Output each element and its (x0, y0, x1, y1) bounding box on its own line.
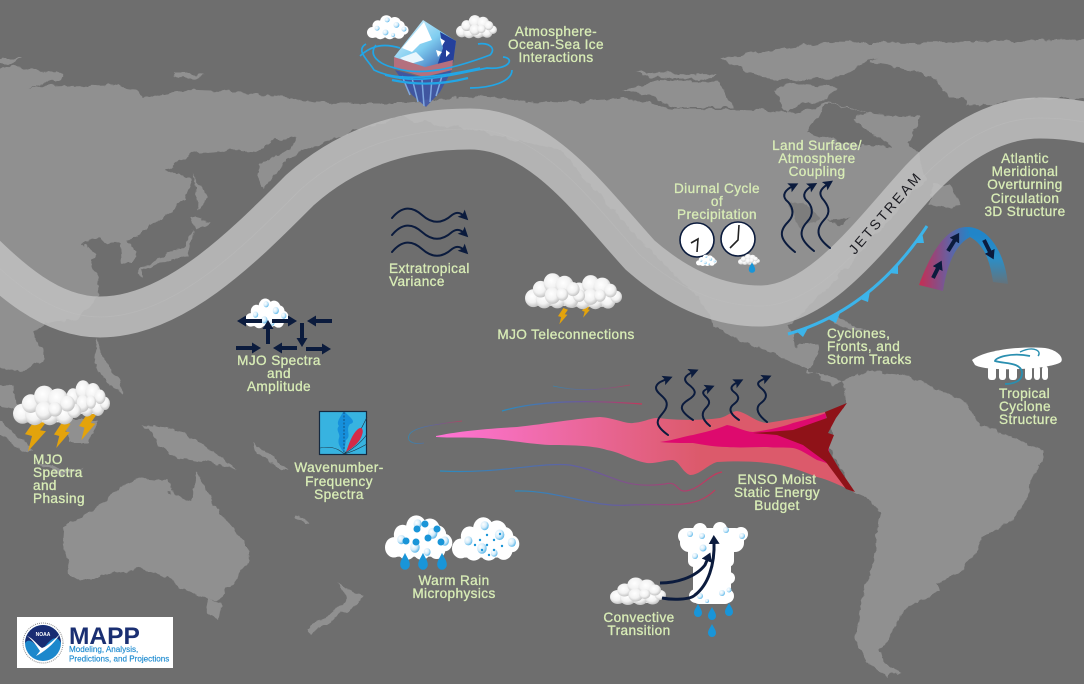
label: extratropical variance: Extratropical (389, 261, 470, 276)
label: diurnal cycle: Diurnal Cycle (674, 181, 760, 196)
icon: MJO phasing storm clouds (13, 380, 110, 451)
icon: cold front (788, 226, 927, 337)
label: tropical cyclone (999, 386, 1058, 427)
label: extratropical variance: Variance (389, 274, 445, 289)
logo: MAPP (17, 617, 173, 668)
label: atmosphere-ocean-sea ice: Atmosphere- (515, 24, 597, 39)
label: atmosphere-ocean-sea ice (508, 24, 604, 65)
label: cyclones: Fronts, and (827, 339, 900, 354)
label: cyclones: Storm Tracks (827, 352, 912, 367)
label: diurnal cycle (674, 181, 760, 222)
label: MJO spectra and phasing: Spectra (33, 465, 83, 480)
logo: MAPP: MAPP (69, 623, 140, 650)
label: warm rain microphysics: Warm Rain (418, 573, 490, 588)
icon: tropical cyclone (972, 348, 1062, 384)
icon: ENSO wavy arrows (656, 372, 767, 435)
icon: convective transition (610, 522, 748, 637)
label: diurnal cycle: of (711, 194, 723, 209)
label: extratropical variance (389, 261, 470, 289)
label: tropical cyclone: Tropical (999, 386, 1050, 401)
label: convective transition: Transition (607, 623, 671, 638)
icon: wavenumber-frequency square (320, 412, 367, 454)
icon: MJO spectra arrows and cloud (236, 299, 332, 349)
icon: warm rain clouds (385, 515, 519, 570)
label: MJO spectra and amplitude: and (267, 366, 291, 381)
label: land surface: Coupling (789, 164, 845, 179)
icon: ENSO streamlines (409, 385, 722, 505)
label: atlantic overturning: Overturning (987, 177, 1063, 192)
label: atlantic overturning: Circulation (991, 191, 1059, 206)
label: convective transition: Convective (603, 610, 675, 625)
label: land surface (772, 138, 862, 179)
label: ENSO moist static energy budget (734, 472, 820, 513)
label: MJO spectra and phasing: MJO (33, 452, 63, 467)
label: atmosphere-ocean-sea ice: Interactions (518, 50, 594, 65)
label: tropical cyclone: Cyclone (999, 399, 1051, 414)
label: cyclones: Cyclones, (827, 326, 890, 341)
label: atlantic overturning: 3D Structure (984, 204, 1066, 219)
label: MJO spectra and amplitude (237, 353, 321, 394)
label: MJO spectra and amplitude: Amplitude (247, 379, 311, 394)
label: warm rain microphysics (412, 573, 496, 601)
label: wavenumber-frequency spectra: Wavenumber- (294, 460, 384, 475)
label: MJO spectra and phasing (33, 452, 85, 506)
label: ENSO moist static energy budget: ENSO Moist (738, 472, 816, 487)
label: atlantic overturning (984, 151, 1066, 219)
logo: MAPP: Predictions, and Projections (69, 654, 169, 664)
logo: MAPP: Modeling, Analysis, (69, 645, 138, 654)
label: atmosphere-ocean-sea ice: Ocean-Sea Ice (508, 37, 604, 52)
label: MJO spectra and phasing: and (33, 478, 57, 493)
icon: diurnal clocks (680, 222, 760, 273)
icon: ENSO tongue (436, 403, 855, 492)
label: MJO teleconnections: MJO Teleconnections (497, 327, 635, 342)
label: ENSO moist static energy budget: Static Energy (734, 485, 820, 500)
label: land surface: Land Surface/ (772, 138, 862, 153)
icon: overturning arc (919, 227, 1008, 291)
label: wavenumber-frequency spectra (294, 460, 384, 502)
label: tropical cyclone: Structure (999, 412, 1058, 427)
label: atlantic overturning: Atlantic (1001, 151, 1049, 166)
label: diurnal cycle: Precipitation (677, 207, 757, 222)
jetstream label: JETSTREAM (845, 168, 925, 257)
icon: land surface arrows (782, 184, 830, 252)
label: MJO spectra and amplitude: MJO Spectra (237, 353, 321, 368)
label: MJO spectra and phasing: Phasing (33, 491, 85, 506)
label: wavenumber-frequency spectra: Frequency (305, 474, 373, 489)
label: ENSO moist static energy budget: Budget (754, 498, 800, 513)
label: cyclones (827, 326, 912, 367)
icon: extratropical waves (392, 209, 464, 256)
label: wavenumber-frequency spectra: Spectra (314, 487, 364, 502)
label: warm rain microphysics: Microphysics (412, 586, 496, 601)
label: convective transition (603, 610, 675, 638)
logo: MAPP: NOAA (36, 632, 51, 638)
icon: MJO teleconnections cloud (525, 273, 622, 324)
label: atlantic overturning: Meridional (992, 164, 1058, 179)
label: land surface: Atmosphere (778, 151, 856, 166)
icon: atmosphere-ocean-sea ice (360, 15, 512, 107)
